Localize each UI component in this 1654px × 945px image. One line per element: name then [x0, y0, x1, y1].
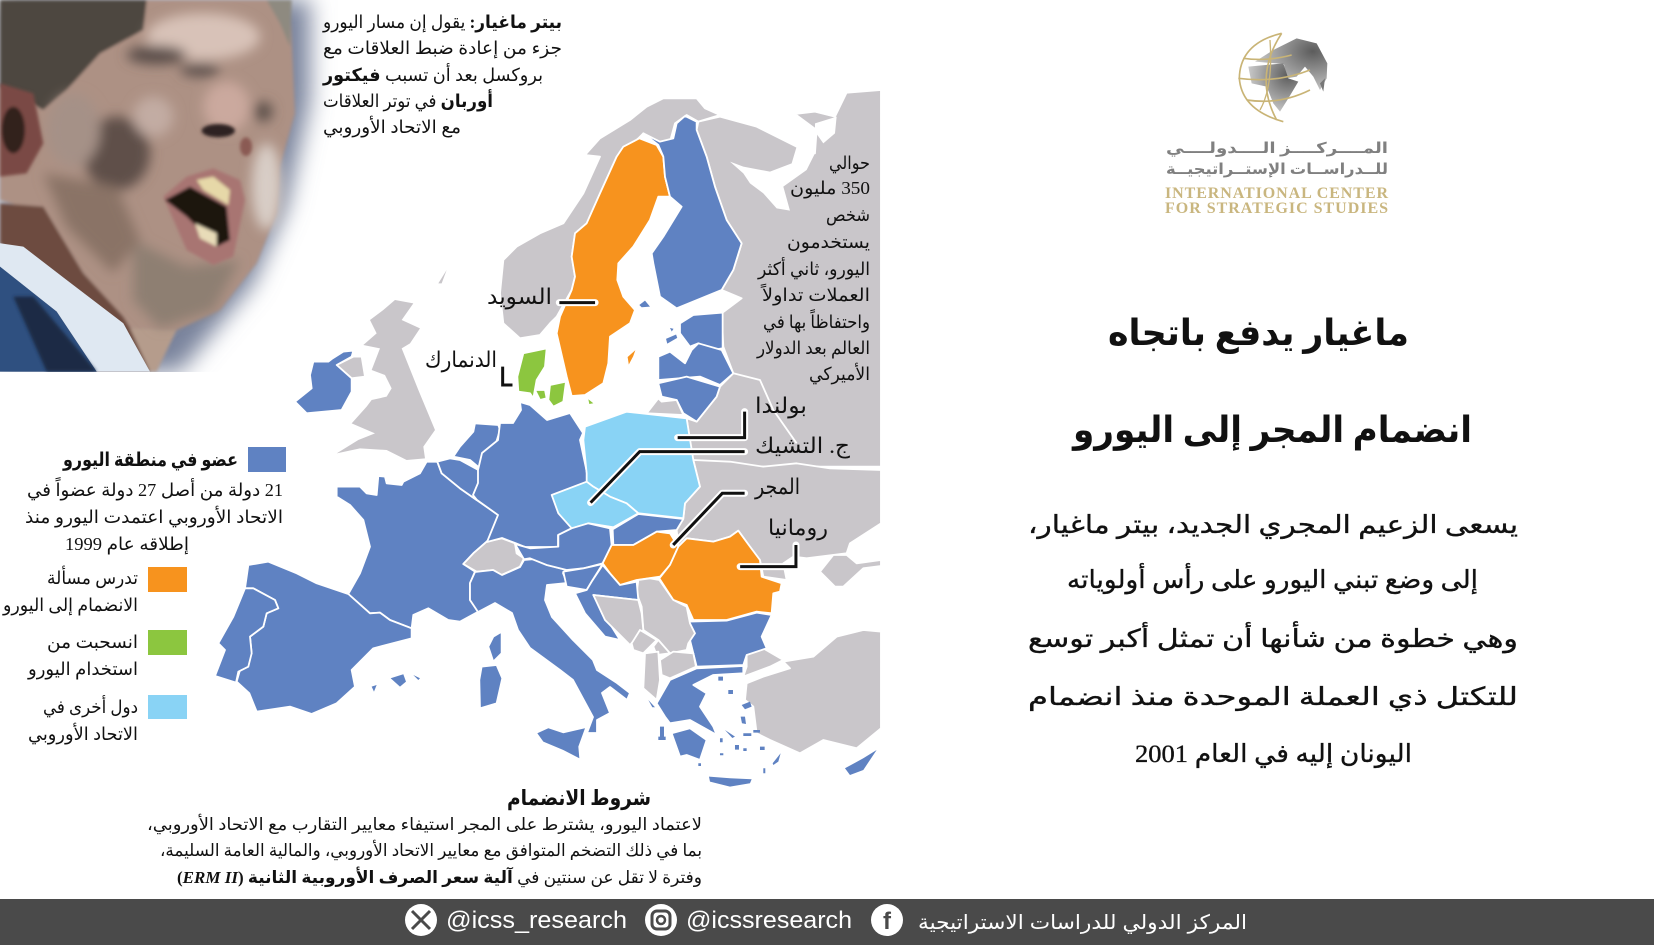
country labels	[425, 284, 851, 540]
Thrace	[743, 648, 783, 677]
Belarus border	[733, 373, 797, 443]
label: Poland: بولندا	[755, 393, 807, 418]
euro usage note: الأميركي	[809, 363, 870, 385]
facial shading	[43, 13, 282, 328]
legend description: إطلاقه عام 1999	[65, 534, 189, 554]
legend text: other EU states	[28, 695, 138, 745]
Slovakia	[613, 514, 683, 545]
Latvia	[658, 343, 733, 385]
photo caption: جزء من إعادة ضبط العلاقات مع	[323, 38, 562, 59]
Austria	[515, 523, 612, 570]
Estonia	[680, 313, 723, 350]
Crete	[709, 777, 752, 787]
Kosovo	[653, 640, 670, 655]
icon: Facebook: f	[883, 908, 892, 935]
Bosnia	[593, 595, 643, 645]
logo: ICSS: للــدراســات الإستــراتيجيــة	[1166, 162, 1388, 178]
summary paragraph: يسعى الزعيم المجري الجديد، بيتر ماغيار،	[1028, 512, 1518, 540]
legend text: other EU states: الاتحاد الأوروبي	[28, 723, 138, 745]
Hungary	[603, 532, 678, 585]
euro usage note: اليورو، ثاني أكثر	[757, 257, 870, 280]
footer bar	[0, 899, 1654, 945]
Turkey	[745, 630, 881, 753]
Finland	[643, 116, 742, 308]
map of Europe	[215, 90, 881, 787]
Ibiza	[372, 685, 377, 692]
Ireland	[295, 351, 353, 413]
Balearic islands	[391, 674, 406, 687]
Peloponnese	[672, 728, 707, 760]
Belgium	[437, 458, 478, 500]
central and south-eastern Europe	[515, 412, 881, 787]
Kola bay	[815, 117, 837, 143]
leader: Denmark	[503, 367, 512, 385]
Denmark Fyn	[536, 390, 546, 399]
footer: X handle: @icss_research	[446, 907, 627, 934]
Saaremaa	[666, 334, 678, 344]
label: Denmark: الدنمارك	[425, 347, 497, 372]
conditions body	[147, 814, 702, 888]
Sardinia	[480, 666, 502, 708]
Netherlands	[454, 424, 498, 466]
portrait photo of Peter Magyar	[0, 0, 310, 372]
Greece mainland	[657, 666, 743, 735]
Albania	[643, 652, 660, 700]
Montenegro	[632, 630, 657, 653]
France	[337, 462, 498, 628]
euro usage note: العملات تداولاً	[760, 283, 870, 306]
logo Arabic name: المــــركــــز الــــدولــــي	[1166, 141, 1388, 157]
Denmark Zealand	[549, 382, 565, 406]
Romania	[659, 531, 782, 620]
logo: ICSS	[1165, 33, 1388, 217]
euro usage note: واحتفاظاً بها في	[763, 309, 870, 333]
Slovenia	[563, 564, 603, 590]
photo caption: أوربان في توتر العلاقات	[323, 89, 493, 112]
south-western Europe	[215, 458, 524, 714]
summary paragraph: إلى وضع تبني اليورو على رأس أولوياته	[1067, 562, 1478, 595]
legend text: considering euro: الانضمام إلى اليورو	[2, 595, 138, 616]
Hiiumaa	[670, 328, 674, 332]
suit jacket	[0, 267, 97, 372]
Aegean and Ionian islands	[648, 677, 765, 773]
leader: Sweden	[559, 299, 595, 306]
Portugal	[215, 588, 278, 683]
icon: X	[405, 904, 437, 936]
shirt collar	[0, 243, 150, 372]
Spain	[237, 562, 412, 714]
conditions body: بما في ذلك التضخم المتوافق مع معايير الاتحاد الأوروبي، والمالية العامة السليمة،	[160, 840, 702, 861]
Rhodes	[773, 753, 781, 765]
swatch: considering euro	[148, 567, 187, 592]
legend description	[25, 477, 283, 554]
euro usage note: العالم بعد الدولار	[756, 338, 870, 359]
nose and mouth	[163, 124, 252, 265]
accession conditions	[147, 786, 702, 888]
legend text: opted out	[27, 632, 138, 680]
Poland	[583, 412, 700, 518]
Aland islands	[639, 301, 650, 307]
footer: organisation name: المركز الدولي للدراسات الاستراتيجية	[918, 912, 1247, 935]
conditions body: لاعتماد اليورو، يشترط على المجر استيفاء معايير التقارب مع الاتحاد الأوروبي،	[147, 814, 702, 835]
Crimea	[820, 555, 881, 587]
Russia and eastern neighbours	[687, 90, 881, 467]
summary paragraph: وهي خطوة من شأنها أن تمثل أكبر توسع	[1028, 620, 1518, 654]
Oland	[608, 360, 615, 380]
legend	[2, 447, 286, 745]
label: Romania: رومانيا	[768, 515, 828, 540]
Germany	[473, 402, 587, 547]
Gotland	[628, 350, 636, 364]
swatch: opted out	[148, 630, 187, 655]
Kaliningrad	[648, 399, 682, 414]
ear	[0, 83, 43, 177]
Czechia	[552, 482, 638, 528]
Bulgaria	[688, 613, 772, 667]
icon: Instagram	[645, 904, 677, 936]
photo caption: بيتر ماغيار: يقول إن مسار اليورو	[322, 12, 562, 33]
Menorca	[413, 675, 420, 680]
Switzerland	[463, 538, 524, 575]
label: Sweden: السويد	[487, 284, 552, 309]
swatch: other EU states	[148, 695, 187, 719]
Norway	[500, 98, 720, 338]
Denmark Jutland	[518, 350, 546, 396]
footer: Instagram handle: @icssresearch	[686, 907, 852, 934]
leader lines	[503, 303, 796, 567]
icon: Facebook	[871, 904, 903, 936]
Lithuania	[658, 377, 720, 422]
euro usage note: يستخدمون	[787, 232, 870, 253]
conditions body: وفترة لا تقل عن سنتين في آلية سعر الصرف الأوروبية الثانية (ERM II)	[177, 866, 702, 888]
label: Czechia: ج. التشيك	[755, 433, 851, 459]
main title: انضمام المجر إلى اليورو	[1071, 410, 1472, 451]
photo shadow	[0, 0, 310, 372]
legend title: euro member: عضو في منطقة اليورو	[62, 450, 238, 471]
Northern Ireland	[338, 358, 364, 378]
Bornholm	[588, 399, 593, 404]
main title	[1071, 313, 1472, 451]
Ukraine and Moldova	[677, 460, 881, 580]
British Isles and Low Countries	[295, 270, 500, 468]
Cyprus	[845, 750, 877, 775]
euro usage note	[756, 153, 870, 385]
photo caption	[322, 12, 562, 138]
Sicily	[537, 728, 585, 758]
logo: ICSS: FOR STRATEGIC STUDIES	[1165, 200, 1388, 217]
northern Europe	[500, 90, 881, 467]
Corsica	[489, 634, 501, 660]
main title: ماغيار يدفع باتجاه	[1108, 313, 1409, 354]
Lesbos	[742, 702, 752, 709]
Italy	[470, 558, 630, 733]
legend text: opted out: استخدام اليورو	[27, 659, 138, 680]
legend text: other EU states: دول أخرى في	[43, 695, 138, 718]
leader: Romania	[740, 545, 796, 567]
photo caption: مع الاتحاد الأوروبي	[323, 116, 461, 138]
legend text: considering euro	[2, 565, 138, 616]
label: Hungary: المجر	[754, 474, 800, 499]
euro usage note: 350 مليون	[790, 178, 870, 199]
leader: Hungary	[673, 493, 745, 545]
globe emblem	[1238, 33, 1327, 122]
summary paragraph: اليونان إليه في العام 2001	[1135, 741, 1412, 769]
Chios	[741, 717, 746, 724]
legend description: 21 دولة من أصل 27 دولة عضواً في	[27, 477, 283, 501]
legend text: considering euro: تدرس مسألة	[47, 565, 138, 588]
Serbia	[637, 578, 695, 653]
conditions heading: شروط الانضمام	[507, 786, 651, 810]
legend text: opted out: انسحبت من	[47, 632, 138, 653]
euro usage note: شخص	[826, 205, 870, 226]
White Sea	[730, 147, 815, 211]
photo caption: بروكسل بعد أن تسبب فيكتور	[322, 63, 543, 86]
Croatia	[575, 565, 638, 640]
euro usage note: حوالي	[829, 153, 870, 174]
Great Britain	[337, 300, 435, 460]
swatch: euro member	[248, 447, 286, 472]
Sweden	[557, 138, 670, 396]
logo English name: INTERNATIONAL CENTER	[1165, 185, 1388, 202]
leader: Czechia	[591, 452, 745, 503]
summary paragraph: للتكتل ذي العملة الموحدة منذ انضمام	[1028, 684, 1518, 711]
head	[0, 0, 295, 372]
North Macedonia	[660, 652, 696, 678]
Scottish isles	[438, 270, 447, 283]
legend description: الاتحاد الأوروبي اعتمدت اليورو منذ	[25, 506, 283, 528]
summary paragraph	[1028, 512, 1518, 769]
leader: Poland	[678, 412, 745, 438]
